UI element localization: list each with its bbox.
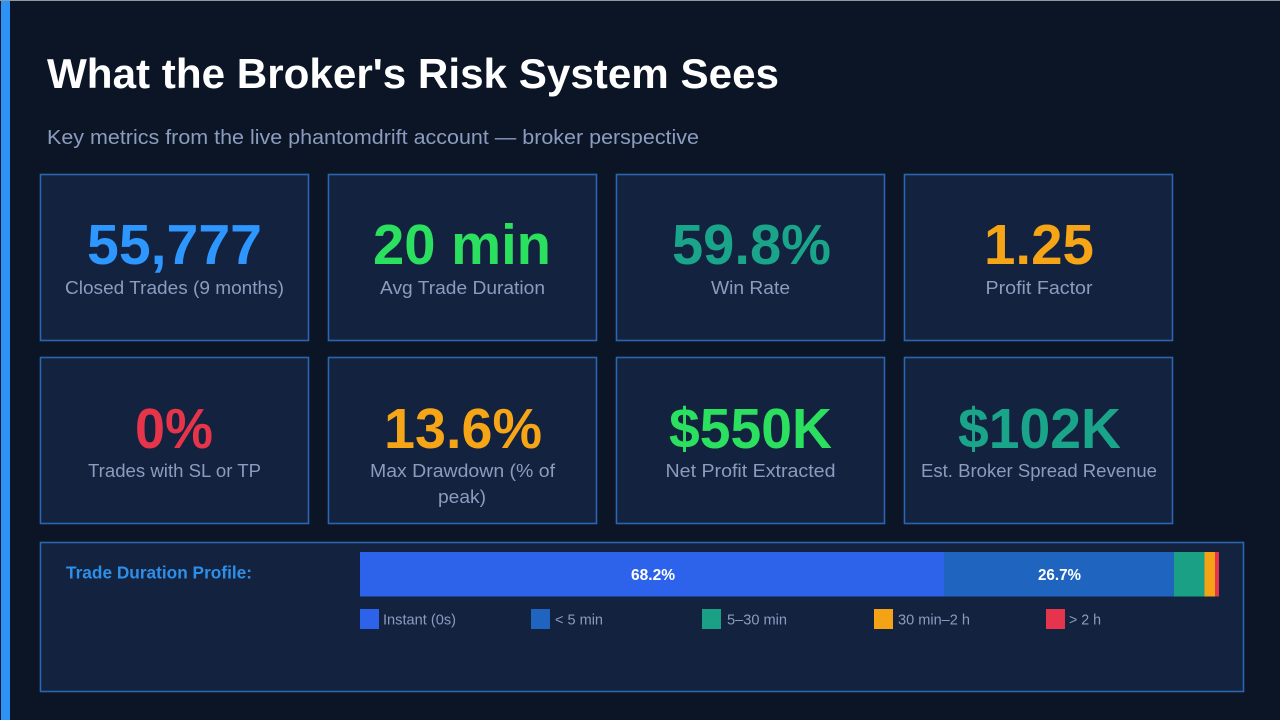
stacked bar chart: 26.7% (1038, 567, 1081, 584)
card: profit factor: Profit Factor (986, 277, 1092, 298)
legend: under 5 minutes: < 5 min (555, 612, 603, 628)
card: closed trades: Closed Trades (9 months) (65, 277, 284, 298)
legend: instant: Instant (0s) (383, 612, 456, 628)
legend: over 2 hours (1046, 609, 1101, 629)
legend: over 2 hours: > 2 h (1069, 612, 1101, 628)
legend: under 5 minutes (531, 609, 603, 629)
card: max drawdown (328, 358, 596, 524)
card: average trade duration: Avg Trade Duration (380, 277, 545, 298)
title: What the Broker's Risk System Sees (47, 50, 779, 97)
card: estimated broker spread revenue: Est. Broker Spread Revenue (921, 460, 1157, 481)
card: profit factor: 1.25 (984, 213, 1094, 277)
panel heading: Trade Duration Profile: (66, 562, 252, 582)
card: net profit extracted (616, 358, 884, 524)
card: estimated broker spread revenue: $102K (958, 397, 1121, 461)
panel: trade duration profile (40, 542, 1244, 692)
card: trades with SL or TP: Trades with SL or TP (88, 460, 261, 481)
left accent bar (1, 1, 10, 720)
card: average trade duration: 20 min (373, 213, 551, 277)
card: max drawdown: Max Drawdown (% of (370, 460, 556, 481)
card: win rate: Win Rate (711, 277, 790, 298)
card: trades with SL or TP (40, 358, 308, 524)
stacked bar chart: 68.2% (631, 567, 675, 584)
card: average trade duration (328, 174, 596, 340)
legend: 30 minutes to 2 hours: 30 min–2 h (898, 612, 970, 628)
legend: instant (360, 609, 456, 629)
legend: 30 minutes to 2 hours (874, 609, 970, 629)
card: net profit extracted: $550K (669, 397, 832, 461)
card: closed trades: 55,777 (87, 213, 262, 277)
subtitle: Key metrics from the live phantomdrift account — broker perspective (47, 126, 699, 149)
card: win rate: 59.8% (672, 213, 831, 277)
card: estimated broker spread revenue (904, 358, 1172, 524)
legend: 5 to 30 minutes (702, 609, 787, 629)
card: closed trades (40, 174, 308, 340)
card: max drawdown: 13.6% (384, 397, 542, 461)
card: max drawdown: peak) (438, 486, 486, 507)
card: trades with SL or TP: 0% (135, 397, 213, 461)
legend: 5 to 30 minutes: 5–30 min (727, 612, 787, 628)
card: profit factor (904, 174, 1172, 340)
stacked bar chart (360, 552, 1219, 596)
card: net profit extracted: Net Profit Extracted (666, 460, 836, 481)
card: win rate (616, 174, 884, 340)
